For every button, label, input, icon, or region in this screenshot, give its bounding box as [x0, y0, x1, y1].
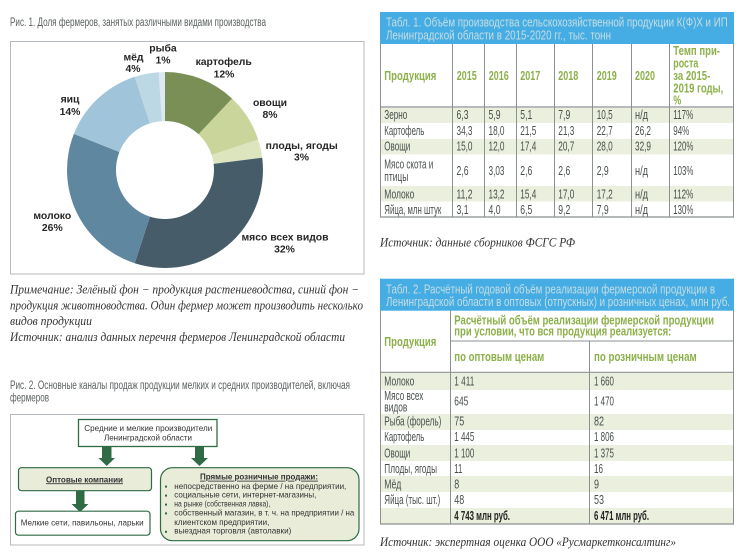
row: яйца: н/д: [635, 203, 649, 217]
row: яйца: 130%: [673, 203, 693, 217]
box: direct retail sales: клиентском предприятии,: [174, 517, 269, 527]
table 1 title bar: Ленинградской области в 2015-2020 гг., тыс. тонн: [386, 27, 611, 42]
table 2 header: по оптовым ценам: [454, 350, 544, 364]
row: молоко: [384, 374, 614, 388]
label: плоды, ягоды: 3%: [294, 153, 309, 164]
row: яйца: 9,2: [558, 203, 570, 217]
label: мёд: мёд: [123, 52, 144, 64]
note text: видов продукции: [10, 314, 92, 328]
label: яиц: [60, 95, 80, 118]
label: картофель: картофель: [196, 56, 252, 68]
label: мёд: 4%: [125, 64, 141, 75]
row: картофель: 1 445: [454, 430, 474, 444]
note text: Примечание: Зелёный фон − продукция растениеводства, синий фон −: [9, 282, 359, 296]
caption: figure 2: [10, 380, 350, 405]
arrow: to retail: [191, 447, 208, 466]
caption: figure 2: Рис. 2. Основные каналы продаж продукции мелких и средних производителей, включая: [10, 380, 350, 392]
row: мясо скота и птицы: Мясо скота и: [384, 157, 433, 171]
label: картофель: 12%: [214, 69, 234, 80]
box: producers: Средние и мелкие производители: [84, 423, 213, 433]
row: картофель: Картофель: [384, 430, 424, 444]
row: плоды, ягоды: 11: [454, 462, 462, 476]
row: картофель: 21,5: [520, 124, 536, 138]
row: овощи: [384, 140, 693, 154]
row: овощи: 1 100: [454, 446, 474, 460]
row: молоко: Молоко: [384, 374, 414, 388]
row: молоко: 112%: [673, 187, 693, 201]
table 1 header row: 2017: [520, 69, 540, 83]
row: плоды, ягоды: [384, 462, 603, 476]
note text: Источник: анализ данных перечня фермеров Ленинградской области: [9, 330, 345, 344]
caption: figure 2: фермеров: [10, 393, 49, 405]
table 2 header: Продукция: [384, 335, 436, 349]
row: мёд: Мёд: [384, 478, 402, 492]
table 1 header row: [384, 44, 723, 107]
table 1 header row: 2018: [558, 69, 578, 83]
panel: donut chart: [10, 42, 364, 274]
row: картофель: [384, 430, 614, 444]
row: зерно: 117%: [673, 108, 693, 122]
row: картофель: 26,2: [635, 124, 651, 138]
row: мёд: 8: [454, 478, 459, 492]
row: мясо скота и птицы: 103%: [673, 164, 693, 178]
row: овощи: 12,0: [488, 140, 505, 154]
box: wholesale companies: [18, 468, 152, 491]
table 1: [380, 12, 734, 217]
row: овощи: 20,7: [558, 140, 574, 154]
box: direct retail sales: [160, 468, 359, 541]
row: молоко: 1 411: [454, 374, 474, 388]
row: овощи: [384, 446, 614, 460]
row: мясо всех видов: [384, 389, 614, 414]
row: зерно: [384, 108, 693, 122]
box: small retailers: [16, 511, 150, 535]
row: зерно: 5,9: [488, 108, 501, 122]
table 1 header row: %: [673, 93, 681, 107]
row: картофель: 94%: [673, 124, 689, 138]
table 1 header row: роста: [673, 56, 699, 70]
row: яйца: Яйца, млн штук: [384, 203, 442, 217]
row: мясо скота и птицы: 2,6: [456, 164, 469, 178]
row: овощи: Овощи: [384, 446, 410, 460]
box: producers: Ленинградской области: [104, 433, 192, 443]
table 1 header row: за 2015-: [673, 69, 710, 83]
table 2 title bar: [380, 279, 734, 311]
box: direct retail sales: выездная торговля (автолавки): [174, 526, 291, 536]
row: рыба: 75: [454, 415, 464, 429]
box: direct retail sales: социальные сети, интернет-магазины,: [174, 490, 316, 500]
label: плоды, ягоды: [266, 141, 338, 164]
arrow: to wholesale: [98, 447, 115, 466]
box: small retailers: Мелкие сети, павильоны, ларьки: [21, 518, 144, 528]
row: молоко: Молоко: [384, 187, 414, 201]
table 2 header: при условии, что вся продукция реализуется:: [454, 325, 671, 339]
row: мясо скота и птицы: н/д: [635, 164, 649, 178]
donut chart: [67, 72, 263, 268]
row: зерно: 10,5: [597, 108, 613, 122]
row: картофель: Картофель: [384, 124, 424, 138]
note text: продукция животноводства. Один фермер может производить несколько: [10, 298, 363, 312]
row: картофель: 22,7: [597, 124, 613, 138]
row: молоко: 15,4: [520, 187, 536, 201]
row: яйца: 3,1: [456, 203, 469, 217]
table 1 header row: 2015: [457, 69, 477, 83]
row: мёд: 9: [594, 478, 599, 492]
row: картофель: 34,3: [456, 124, 473, 138]
table 1 stripes: [381, 108, 733, 202]
row: овощи: 120%: [673, 140, 693, 154]
row: овощи: 15,0: [456, 140, 473, 154]
caption: figure 1: Рис. 1. Доля фермеров, занятых различными видами производства: [10, 17, 266, 29]
row: total: [454, 509, 649, 523]
label: яиц: 14%: [60, 107, 80, 118]
table 2 header: по розничным ценам: [594, 350, 697, 364]
row: зерно: 5,1: [520, 108, 532, 122]
row: картофель: 18,0: [488, 124, 505, 138]
table 2 stripes: [381, 373, 733, 524]
row: яйца: 7,9: [597, 203, 609, 217]
bullets: [165, 486, 167, 533]
row: зерно: 6,3: [456, 108, 469, 122]
table 2: [380, 279, 734, 524]
label: овощи: овощи: [253, 98, 287, 109]
table 1 header row: 2020: [635, 69, 655, 83]
row: зерно: н/д: [635, 108, 649, 122]
box: wholesale companies: Оптовые компании: [46, 474, 123, 484]
label: плоды, ягоды: плоды, ягоды: [266, 141, 338, 152]
label: молоко: молоко: [33, 211, 71, 222]
box: direct retail sales: непосредственно на ферме / на предприятии,: [174, 481, 346, 491]
label: мясо всех видов: 32%: [274, 245, 295, 256]
row: total: 4 743 млн руб.: [454, 509, 510, 523]
row: мясо скота и птицы: птицы: [384, 170, 408, 184]
row: молоко: 13,2: [488, 187, 505, 201]
label: молоко: [33, 211, 71, 234]
label: мёд: [123, 52, 144, 75]
row: мясо скота и птицы: [384, 157, 693, 184]
arrow: to small retailers: [72, 491, 88, 512]
row: яйца: 48: [454, 493, 464, 507]
row: яйца: 6,5: [520, 203, 532, 217]
table 1 title bar: [380, 12, 734, 44]
row: овощи: Овощи: [384, 140, 410, 154]
row: рыба: [384, 415, 604, 429]
label: овощи: 8%: [262, 110, 278, 121]
row: яйца: [384, 203, 693, 217]
row: плоды, ягоды: Плоды, ягоды: [384, 462, 437, 476]
row: молоко: 17,0: [558, 187, 574, 201]
row: яйца: [384, 493, 604, 507]
row: картофель: 1 806: [594, 430, 614, 444]
label: молоко: 26%: [42, 223, 63, 234]
row: молоко: 1 660: [594, 374, 614, 388]
row: мёд: [384, 478, 599, 492]
row: мясо скота и птицы: 2,9: [597, 164, 609, 178]
row: картофель: 21,3: [558, 124, 574, 138]
row: картофель: [384, 124, 689, 138]
box: direct retail sales: на рынке (собственная лавка),: [174, 499, 270, 509]
table 2 grid: [380, 310, 734, 524]
table 1 header row: Продукция: [384, 69, 436, 83]
row: рыба: 82: [594, 415, 604, 429]
label: мясо всех видов: мясо всех видов: [241, 233, 329, 244]
row: мясо всех видов: Мясо всех: [384, 389, 424, 403]
row: зерно: Зерно: [384, 108, 407, 122]
row: зерно: 7,9: [558, 108, 570, 122]
row: яйца: 53: [594, 493, 604, 507]
row: мясо скота и птицы: 2,6: [558, 164, 570, 178]
label: картофель: [196, 56, 252, 80]
table 1 grid: [380, 44, 734, 217]
row: овощи: 28,0: [597, 140, 613, 154]
table 1 header row: 2019: [597, 69, 617, 83]
row: овощи: 17,4: [520, 140, 536, 154]
row: мясо всех видов: 645: [454, 395, 468, 409]
row: total: 6 471 млн руб.: [594, 509, 649, 523]
row: мясо всех видов: видов: [384, 400, 408, 414]
table 1 header row: 2016: [489, 69, 509, 83]
row: мясо скота и птицы: 2,6: [520, 164, 532, 178]
row: рыба: Рыба (форель): [384, 415, 441, 429]
row: молоко: 11,2: [456, 187, 473, 201]
row: овощи: 1 375: [594, 446, 614, 460]
panel: sales channels diagram: [10, 414, 364, 545]
note text: [9, 282, 363, 344]
label: мясо всех видов: [241, 233, 329, 256]
box: direct retail sales: Прямые розничные продажи:: [200, 472, 318, 482]
row: яйца: Яйца (тыс. шт.): [384, 493, 440, 507]
row: молоко: [384, 187, 693, 201]
row: мясо скота и птицы: 3,03: [488, 164, 505, 178]
box: producers: [78, 420, 217, 446]
source: table 1: Источник: данные сборников ФСГС РФ: [379, 236, 575, 250]
source: table 2: Источник: экспертная оценка ООО «Русмаркетконсалтинг»: [379, 535, 676, 549]
label: яиц: яиц: [61, 95, 80, 106]
row: молоко: 17,2: [597, 187, 613, 201]
label: рыба: рыба: [149, 42, 177, 54]
box: direct retail sales: собственный магазин, в т. ч. на предприятии / на: [174, 507, 355, 517]
table 1 header row: 2019 годы,: [673, 81, 723, 95]
table 1 header row: Темп при-: [673, 44, 720, 58]
label: рыба: 1%: [155, 56, 171, 66]
row: яйца: 4,0: [488, 203, 501, 217]
row: мясо всех видов: 1 470: [594, 395, 614, 409]
table 2 header: [384, 313, 714, 364]
row: плоды, ягоды: 16: [594, 462, 603, 476]
label: рыба: [149, 42, 177, 66]
row: овощи: 32,9: [635, 140, 651, 154]
label: овощи: [253, 98, 287, 121]
row: молоко: н/д: [635, 187, 649, 201]
